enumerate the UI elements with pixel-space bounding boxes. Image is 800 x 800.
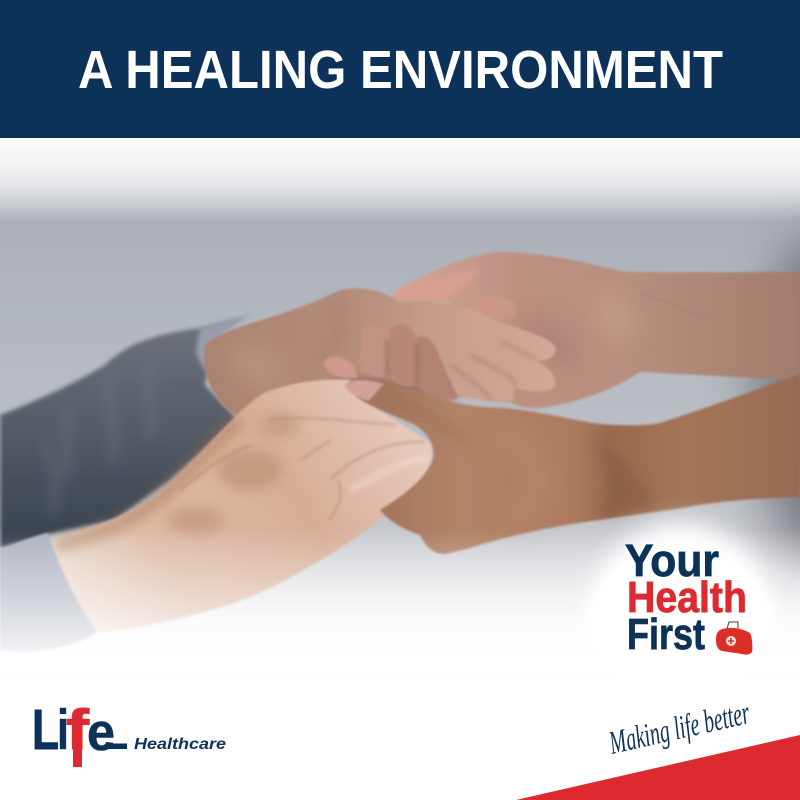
wordmark e: e	[87, 703, 115, 762]
upper elderly hand	[204, 288, 556, 416]
wordmark f: f	[66, 698, 90, 762]
upper young hand	[393, 252, 800, 408]
title: A HEALING ENVIRONMENT	[78, 40, 723, 100]
front elderly hand	[48, 380, 432, 632]
icon: first aid kit	[716, 622, 752, 655]
grey sleeve of elderly arm	[0, 314, 250, 548]
red corner wedge	[516, 735, 800, 800]
your health first badge	[625, 535, 752, 659]
wordmark i: i	[57, 698, 69, 762]
wordmark L: L	[32, 698, 59, 762]
your: Your	[625, 535, 719, 586]
front young hand	[345, 374, 800, 554]
e tail	[108, 744, 127, 749]
healthcare: Healthcare	[134, 736, 226, 753]
age spots	[55, 413, 300, 545]
f stem	[73, 740, 82, 767]
lower sleeve cuff	[0, 533, 97, 652]
header band	[0, 0, 800, 138]
logo: Life Healthcare	[32, 698, 226, 767]
photo: holding hands	[0, 138, 800, 698]
health: Health	[627, 573, 747, 622]
young fingertips between hands	[324, 324, 460, 405]
first: First	[627, 610, 705, 659]
